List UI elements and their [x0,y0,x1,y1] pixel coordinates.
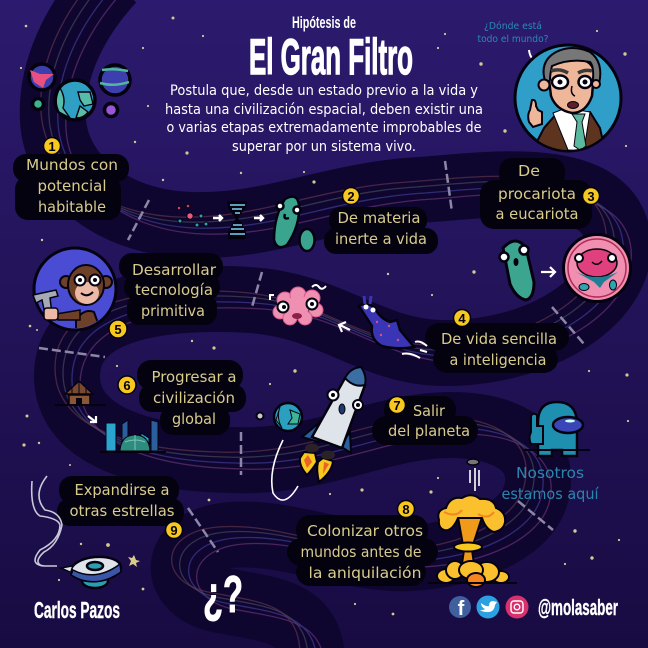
icon: brain [270,285,326,325]
step 7 label: del planeta [388,422,470,440]
speech text: todo el mundo? [478,34,548,45]
credit: Carlos Pazos [34,597,120,623]
icon: earth [274,403,302,431]
step 7 label [372,396,478,445]
intro text: superar por un sistema vivo. [232,139,416,155]
icon: facebook [449,596,471,620]
speech text [478,21,548,45]
step 8 label: mundos antes de [300,543,422,561]
badge 9: 9 [170,523,178,538]
step 4 label [425,310,569,373]
step 8 label [287,500,438,586]
step 4 label: De vida sencilla [441,330,557,348]
eukaryote cell [564,234,630,302]
icon: presenter portrait [515,45,621,155]
icon: molecules to DNA to bacteria [177,197,314,251]
step 3 label: procariota [498,185,576,203]
icon: facebook: f [458,598,465,620]
stage dividers [39,161,584,552]
caption: nosotros estamos aquí [502,464,599,503]
icon: bacterium to eukaryote [500,234,630,302]
step 1 label: habitable [38,198,106,216]
badge 7: 7 [393,398,401,413]
step 1 label [13,138,129,220]
icon: mushroom cloud [428,495,517,587]
badge 3: 3 [587,189,595,204]
step 2 label: De materia [338,209,420,227]
badge 2: 2 [347,189,355,204]
step 6 label [118,360,246,435]
speech tick [529,50,539,63]
head [548,58,594,113]
step 5 label [109,253,223,338]
main title: El Gran Filtro [249,29,413,85]
step 9 label [57,476,184,538]
step 6 label: Progresar a [152,368,236,386]
step 8 label: Colonizar otros [307,522,423,540]
step 2 label: inerte a vida [335,230,427,248]
arrow [541,267,555,277]
icon: rocket [300,367,366,482]
ufo smoke trail [32,476,62,566]
caption: nosotros estamos aquí: estamos aquí [502,485,599,503]
step 5 label: tecnología [135,281,213,299]
small bacterium [300,229,314,251]
arrow [339,322,350,332]
icon: flying saucer [61,555,122,588]
icon: instagram [506,596,528,618]
step 1 label: Mundos con [26,156,118,174]
step 9 label: otras estrellas [70,502,175,520]
icon: city [100,420,166,452]
icon: planets [29,64,130,120]
DNA [227,201,247,239]
rocket trail [272,440,298,500]
arrow [213,215,222,221]
badge 8 [398,500,414,518]
step 5 label: primitiva [141,302,205,320]
speech text: ¿Dónde está [484,21,542,32]
icon: crewmate [524,402,590,456]
step 7 label: Salir [413,402,446,420]
intro text: o varias etapas extremadamente improbables de [166,120,482,136]
caption: nosotros estamos aquí: Nosotros [516,464,584,482]
arrow [254,215,263,221]
bacterium [500,241,534,300]
molecules [177,204,208,227]
badge 1: 1 [48,139,56,154]
badge 5: 5 [114,322,122,337]
intro text [165,83,483,155]
icon: monkey with hammer [33,248,116,340]
subtitle: Hipótesis de [292,13,356,32]
icon: twitter [476,596,500,618]
step 1 label: potencial [38,177,106,195]
step 3 label: a eucariota [496,205,578,223]
badge 8: 8 [402,502,410,517]
title block [249,13,413,85]
step 8 label: la aniquilación [308,564,422,582]
step 5 label: Desarrollar [132,261,217,279]
question marks: ¿? [203,566,243,624]
icon: falling disk [467,459,479,491]
badge 4: 4 [458,311,466,326]
step 3 label: De [518,162,540,180]
bacterium [274,197,300,247]
badge 6: 6 [123,378,131,393]
icon: sea slug [359,296,427,358]
icon: hut [55,381,106,405]
step 6 label: global [172,410,216,428]
step 3 label [480,158,600,229]
icon: star [128,555,140,567]
step 2 label [324,188,438,254]
intro text: Postula que, desde un estado previo a la vida y [170,83,478,99]
icon: moon [256,412,264,420]
step 6 label: civilización [153,389,235,407]
step 4 label: a inteligencia [450,351,546,369]
arrow [88,416,96,422]
step 9 label: Expandirse a [74,481,170,499]
badge 4 [454,310,470,326]
intro text: hasta una civilización espacial, deben existir una [165,102,483,118]
